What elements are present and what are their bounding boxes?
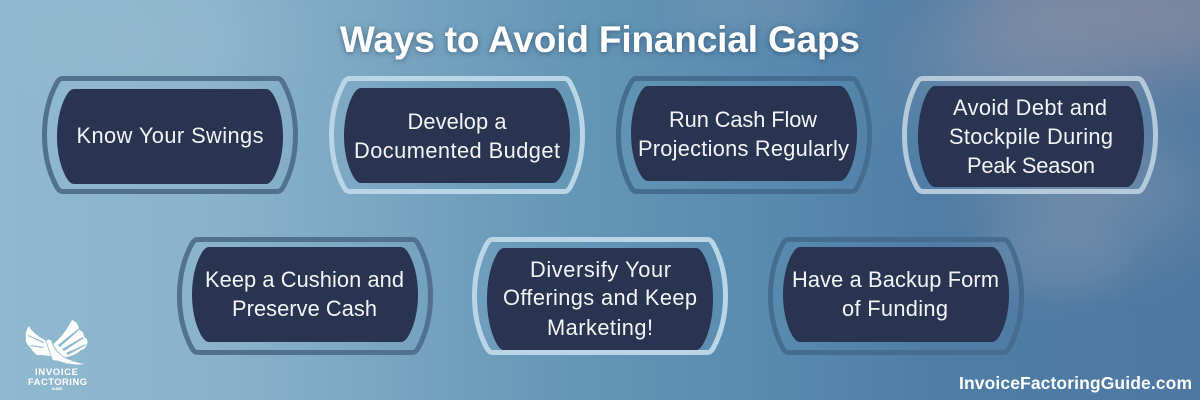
card: Avoid Debt and Stockpile During Peak Season: Avoid Debt and [953,95,1107,120]
website url: InvoiceFactoringGuide.com [959,373,1192,393]
logo: Invoice Factoring Guide eagle [26,320,87,391]
title: Ways to Avoid Financial Gaps [340,19,860,60]
card: Diversify Your Offerings and Keep Marketing!: Offerings and Keep [503,285,697,310]
card: Run Cash Flow Projections Regularly: Projections Regularly [638,136,849,161]
text: Invoice Factoring: GUIDE [52,386,63,391]
card: Avoid Debt and Stockpile During Peak Season: Peak Season [967,153,1095,178]
card: Have a Backup Form of Funding: of Funding [842,296,948,321]
card: Avoid Debt and Stockpile During Peak Season [904,78,1156,192]
card: Develop a Documented Budget: Develop a [408,109,507,134]
card: Diversify Your Offerings and Keep Marketing!: Marketing! [547,315,653,340]
card: Know Your Swings: Know Your Swings [76,123,264,148]
card: Keep a Cushion and Preserve Cash: Keep a Cushion and [205,267,404,292]
icon: eagle wings [26,320,87,365]
card: Keep a Cushion and Preserve Cash: Preserve Cash [232,296,377,321]
card: Run Cash Flow Projections Regularly: Run Cash Flow [669,107,817,132]
text: Invoice Factoring: FACTORING [28,377,87,388]
text: Invoice Factoring [28,367,87,391]
card: Diversify Your Offerings and Keep Marketing! [474,240,726,352]
card: Have a Backup Form of Funding [770,240,1022,352]
card: Develop a Documented Budget: Documented Budget [354,138,560,163]
card: Avoid Debt and Stockpile During Peak Season: Stockpile During [949,124,1113,149]
card: Have a Backup Form of Funding: Have a Backup Form [792,267,999,292]
card: Keep a Cushion and Preserve Cash [180,240,430,352]
card: Run Cash Flow Projections Regularly [618,78,870,192]
card: Know Your Swings [44,78,296,192]
card: Diversify Your Offerings and Keep Marketing!: Diversify Your [530,257,671,282]
card: Develop a Documented Budget [332,78,582,192]
text: Invoice Factoring: INVOICE [35,367,78,378]
background sky and clouds [30,0,1200,295]
